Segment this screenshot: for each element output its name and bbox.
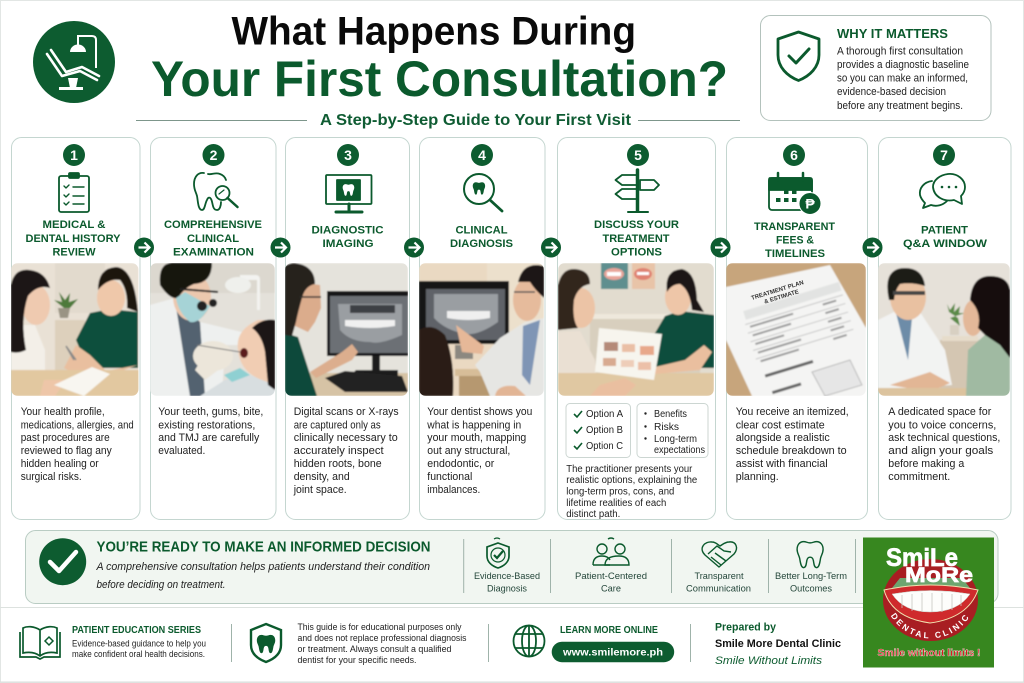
- footer: prepared by: Prepared by: [715, 622, 777, 634]
- photo: dentist examining patient: [150, 263, 275, 396]
- panel: step 7: [878, 138, 1011, 520]
- benefit: patient-centered care: [575, 538, 647, 594]
- options box: Option A: [586, 409, 623, 420]
- photo: itemized treatment plan and estimate: [726, 263, 866, 396]
- panel: step 3: [285, 138, 410, 520]
- step text: and TMJ are carefully: [158, 432, 260, 444]
- options box: Option B: [586, 425, 623, 436]
- step text: clear cost estimate: [736, 419, 825, 431]
- step text: accurately inspect: [294, 445, 384, 457]
- footer: patient education series: [20, 625, 206, 659]
- step text: [566, 464, 698, 520]
- step text: The practitioner presents your: [566, 464, 693, 475]
- banner text: before deciding on treatment.: [96, 579, 226, 591]
- step heading: [450, 224, 513, 250]
- step text: Your health profile,: [21, 406, 105, 418]
- step text: imbalances.: [427, 484, 480, 496]
- logo: Smile More Dental Clinic: SmiLe: [886, 544, 958, 572]
- website pill: www.smilemore.ph: [562, 646, 663, 658]
- step text: you to voice concerns,: [888, 419, 996, 431]
- step number 7: 7: [940, 147, 948, 163]
- step heading: REVIEW: [52, 246, 96, 258]
- step number 6: [783, 144, 805, 166]
- benefit: evidence-based diagnosis: Evidence-Based: [474, 571, 540, 581]
- footer: prepared by: Smile More Dental Clinic: [715, 638, 841, 650]
- icon: open book: [20, 627, 60, 659]
- benefit: evidence-based diagnosis: [474, 538, 540, 594]
- photo: patient and staff reviewing history form: [11, 263, 139, 396]
- why it matters text: provides a diagnostic baseline: [837, 59, 969, 71]
- step number 5: 5: [634, 147, 642, 163]
- panel: step 5: [558, 138, 716, 520]
- arrows between steps: [134, 238, 882, 258]
- step heading: [312, 224, 384, 250]
- considerations box: [637, 404, 708, 458]
- step text: joint space.: [293, 484, 347, 496]
- title line 1: What Happens During: [232, 10, 636, 54]
- step text: clinically necessary to: [294, 432, 398, 444]
- step number 2: [202, 144, 224, 166]
- panel: informed decision banner: [26, 530, 998, 604]
- step heading: TRANSPARENT: [754, 221, 835, 233]
- why it matters text: so you can make an informed,: [837, 72, 968, 84]
- photo: dentist pointing at panoramic x-ray: [285, 263, 408, 396]
- step heading: DIAGNOSIS: [450, 238, 513, 250]
- step text: Your teeth, gums, bite,: [158, 406, 263, 418]
- step text: commitment.: [888, 471, 950, 483]
- step text: your mouth, mapping: [427, 432, 526, 444]
- banner text: A comprehensive consultation helps patients understand their condition: [96, 561, 430, 573]
- photo: itemized treatment plan and estimate: & ESTIMATE: [764, 289, 800, 306]
- step text: reviewed to flag any: [21, 445, 112, 457]
- step heading: [594, 219, 679, 258]
- step text: hidden healing or: [21, 458, 99, 470]
- step text: ask technical questions,: [888, 432, 1000, 444]
- icon: shield check: [778, 32, 819, 80]
- step number 3: [337, 144, 359, 166]
- step text: endodontic, or: [427, 458, 495, 470]
- footer: disclaimer: [251, 622, 467, 665]
- footer text: Evidence-based guidance to help you: [72, 639, 206, 649]
- website pill: [552, 642, 674, 662]
- step number 5: [627, 144, 649, 166]
- benefit: patient-centered care: Patient-Centered: [575, 571, 647, 581]
- step text: Digital scans or X-rays: [294, 406, 399, 418]
- considerations box: expectations: [654, 445, 705, 456]
- benefit: better long-term outcomes: [775, 542, 847, 594]
- disclaimer text: dentist for your specific needs.: [298, 655, 416, 665]
- photo: dentist explaining x-ray to patient: [419, 263, 544, 396]
- step heading: [26, 219, 121, 258]
- step text: existing restorations,: [158, 419, 255, 431]
- disclaimer text: or treatment. Always consult a qualified: [298, 644, 452, 654]
- step number 4: [471, 144, 493, 166]
- step text: density, and: [294, 471, 350, 483]
- step text: surgical risks.: [21, 471, 82, 483]
- step text: distinct path.: [566, 509, 620, 520]
- benefit: better long-term outcomes: Better Long-Term: [775, 571, 847, 581]
- step heading: Q&A WINDOW: [903, 238, 988, 250]
- step heading: DISCUSS YOUR: [594, 219, 679, 231]
- step text: [426, 406, 532, 496]
- disclaimer text: This guide is for educational purposes only: [298, 622, 462, 632]
- icon: clipboard checklist: [59, 173, 89, 212]
- panel: step 6: [726, 138, 868, 520]
- subtitle: A Step-by-Step Guide to Your First Visit: [320, 112, 632, 129]
- step text: lifetime realities of each: [566, 498, 666, 509]
- step heading: EXAMINATION: [173, 246, 254, 258]
- benefit: transparent communication: Transparent: [694, 571, 744, 581]
- icon: tooth with magnifier: [194, 173, 238, 210]
- step heading: PATIENT: [921, 224, 968, 236]
- step number 2: 2: [210, 147, 218, 163]
- step text: medications, allergies, and: [21, 419, 134, 431]
- icon: calendar with peso coin: [769, 173, 821, 214]
- disclaimer text: and does not replace professional diagnosis: [298, 633, 467, 643]
- step number 1: 1: [70, 147, 78, 163]
- step text: [736, 406, 849, 483]
- title line 2: Your First Consultation?: [151, 51, 728, 107]
- icon: calendar with peso coin: ₱: [805, 196, 815, 212]
- step text: Your dentist shows you: [427, 406, 532, 418]
- arrow 2 to 3: [270, 238, 290, 258]
- step heading: DIAGNOSTIC: [312, 224, 384, 236]
- why it matters heading: WHY IT MATTERS: [837, 27, 948, 41]
- step number 4: 4: [478, 147, 486, 163]
- footer: prepared by: Smile Without Limits: [715, 655, 823, 667]
- icon: magnifier with tooth: [464, 174, 502, 211]
- banner heading: YOU’RE READY TO MAKE AN INFORMED DECISION: [96, 539, 430, 556]
- step heading: IMAGING: [322, 238, 374, 250]
- step text: [158, 406, 263, 457]
- step number 6: 6: [790, 147, 798, 163]
- step heading: TIMELINES: [765, 248, 825, 260]
- benefit: patient-centered care: Care: [601, 584, 621, 594]
- step number 3: 3: [344, 147, 352, 163]
- considerations box: Benefits: [654, 409, 687, 420]
- logo: Smile More Dental Clinic: MoRe: [905, 564, 973, 587]
- step text: before making a: [888, 458, 964, 470]
- footer heading: PATIENT EDUCATION SERIES: [72, 625, 201, 636]
- photo: dentist listening to patient: [878, 263, 1010, 396]
- why it matters text: before any treatment begins.: [837, 100, 963, 112]
- step heading: CLINICAL: [187, 233, 239, 245]
- options box: Option C: [586, 441, 623, 452]
- footer text: make confident oral health decisions.: [72, 649, 205, 659]
- icon: dental chair logo: [33, 21, 115, 103]
- benefit: evidence-based diagnosis: Diagnosis: [487, 584, 527, 594]
- step heading: [164, 219, 262, 258]
- benefit: transparent communication: Communication: [686, 584, 751, 594]
- panel: why it matters: [760, 16, 991, 120]
- step text: evaluated.: [158, 445, 205, 457]
- step text: You receive an itemized,: [736, 406, 849, 418]
- arrow 3 to 4: [404, 238, 424, 258]
- footer: prepared by: [715, 622, 841, 667]
- step heading: CLINICAL: [456, 224, 508, 236]
- step text: planning.: [736, 471, 779, 483]
- arrow 4 to 5: [541, 238, 561, 258]
- icon: signpost: [616, 170, 659, 212]
- step text: A dedicated space for: [888, 406, 992, 418]
- step heading: [903, 224, 988, 250]
- step text: [21, 406, 134, 483]
- icon: chat bubbles: [920, 174, 965, 208]
- step number 1: [63, 144, 85, 166]
- photo: staff showing treatment options brochure: [558, 263, 714, 396]
- icon: globe: [514, 626, 544, 656]
- step text: long-term pros, cons, and: [566, 486, 674, 498]
- icon: shield with tooth: [251, 624, 281, 662]
- step heading: MEDICAL &: [42, 219, 106, 231]
- step heading: FEES &: [776, 234, 814, 246]
- step text: [888, 406, 1000, 483]
- step heading: OPTIONS: [611, 246, 662, 258]
- step text: out any structural,: [427, 445, 510, 457]
- step text: realistic options, explaining the: [566, 475, 698, 486]
- step text: [293, 406, 399, 496]
- step text: are captured only as: [294, 419, 381, 431]
- options box: [566, 404, 630, 458]
- step text: what is happening in: [426, 419, 521, 431]
- benefit: better long-term outcomes: Outcomes: [790, 584, 833, 594]
- step text: alongside a realistic: [736, 432, 830, 444]
- icon: monitor with tooth: [326, 175, 372, 212]
- photo: itemized treatment plan and estimate: TREATMENT PLAN: [751, 280, 805, 302]
- step text: hidden roots, bone: [294, 458, 382, 470]
- step text: functional: [427, 471, 472, 483]
- panel: step 1: [11, 138, 140, 520]
- step heading: DENTAL HISTORY: [26, 233, 121, 245]
- logo: Smile More Dental Clinic: DENTAL CLINIC: [890, 612, 968, 638]
- arrow 1 to 2: [134, 238, 154, 258]
- footer: learn more online: [514, 625, 674, 662]
- considerations box: Long-term: [654, 434, 697, 445]
- step text: and align your goals: [888, 445, 994, 457]
- disclaimer text: [298, 622, 467, 665]
- learn more heading: LEARN MORE ONLINE: [560, 625, 658, 636]
- step heading: TREATMENT: [602, 233, 670, 245]
- why it matters text: [837, 46, 969, 112]
- footer text: [72, 639, 206, 659]
- step text: schedule breakdown to: [736, 445, 847, 457]
- step text: assist with financial: [736, 458, 828, 470]
- title: [151, 10, 728, 107]
- banner text: [96, 561, 430, 591]
- arrow 5 to 6: [710, 238, 730, 258]
- arrow 6 to 7: [862, 238, 882, 258]
- icon: check circle: [39, 538, 86, 585]
- logo: Smile More Dental Clinic: [863, 538, 994, 668]
- benefit: transparent communication: [686, 542, 751, 594]
- step number 7: [933, 144, 955, 166]
- why it matters text: evidence-based decision: [837, 86, 946, 98]
- step heading: [754, 221, 835, 260]
- considerations box: Risks: [654, 422, 679, 433]
- panel: step 4: [419, 138, 545, 520]
- why it matters text: A thorough first consultation: [837, 46, 963, 58]
- logo: Smile More Dental Clinic: Smile without limits !: [878, 648, 980, 659]
- step text: past procedures are: [21, 432, 110, 444]
- step heading: COMPREHENSIVE: [164, 219, 262, 231]
- panel: step 2: [150, 138, 276, 520]
